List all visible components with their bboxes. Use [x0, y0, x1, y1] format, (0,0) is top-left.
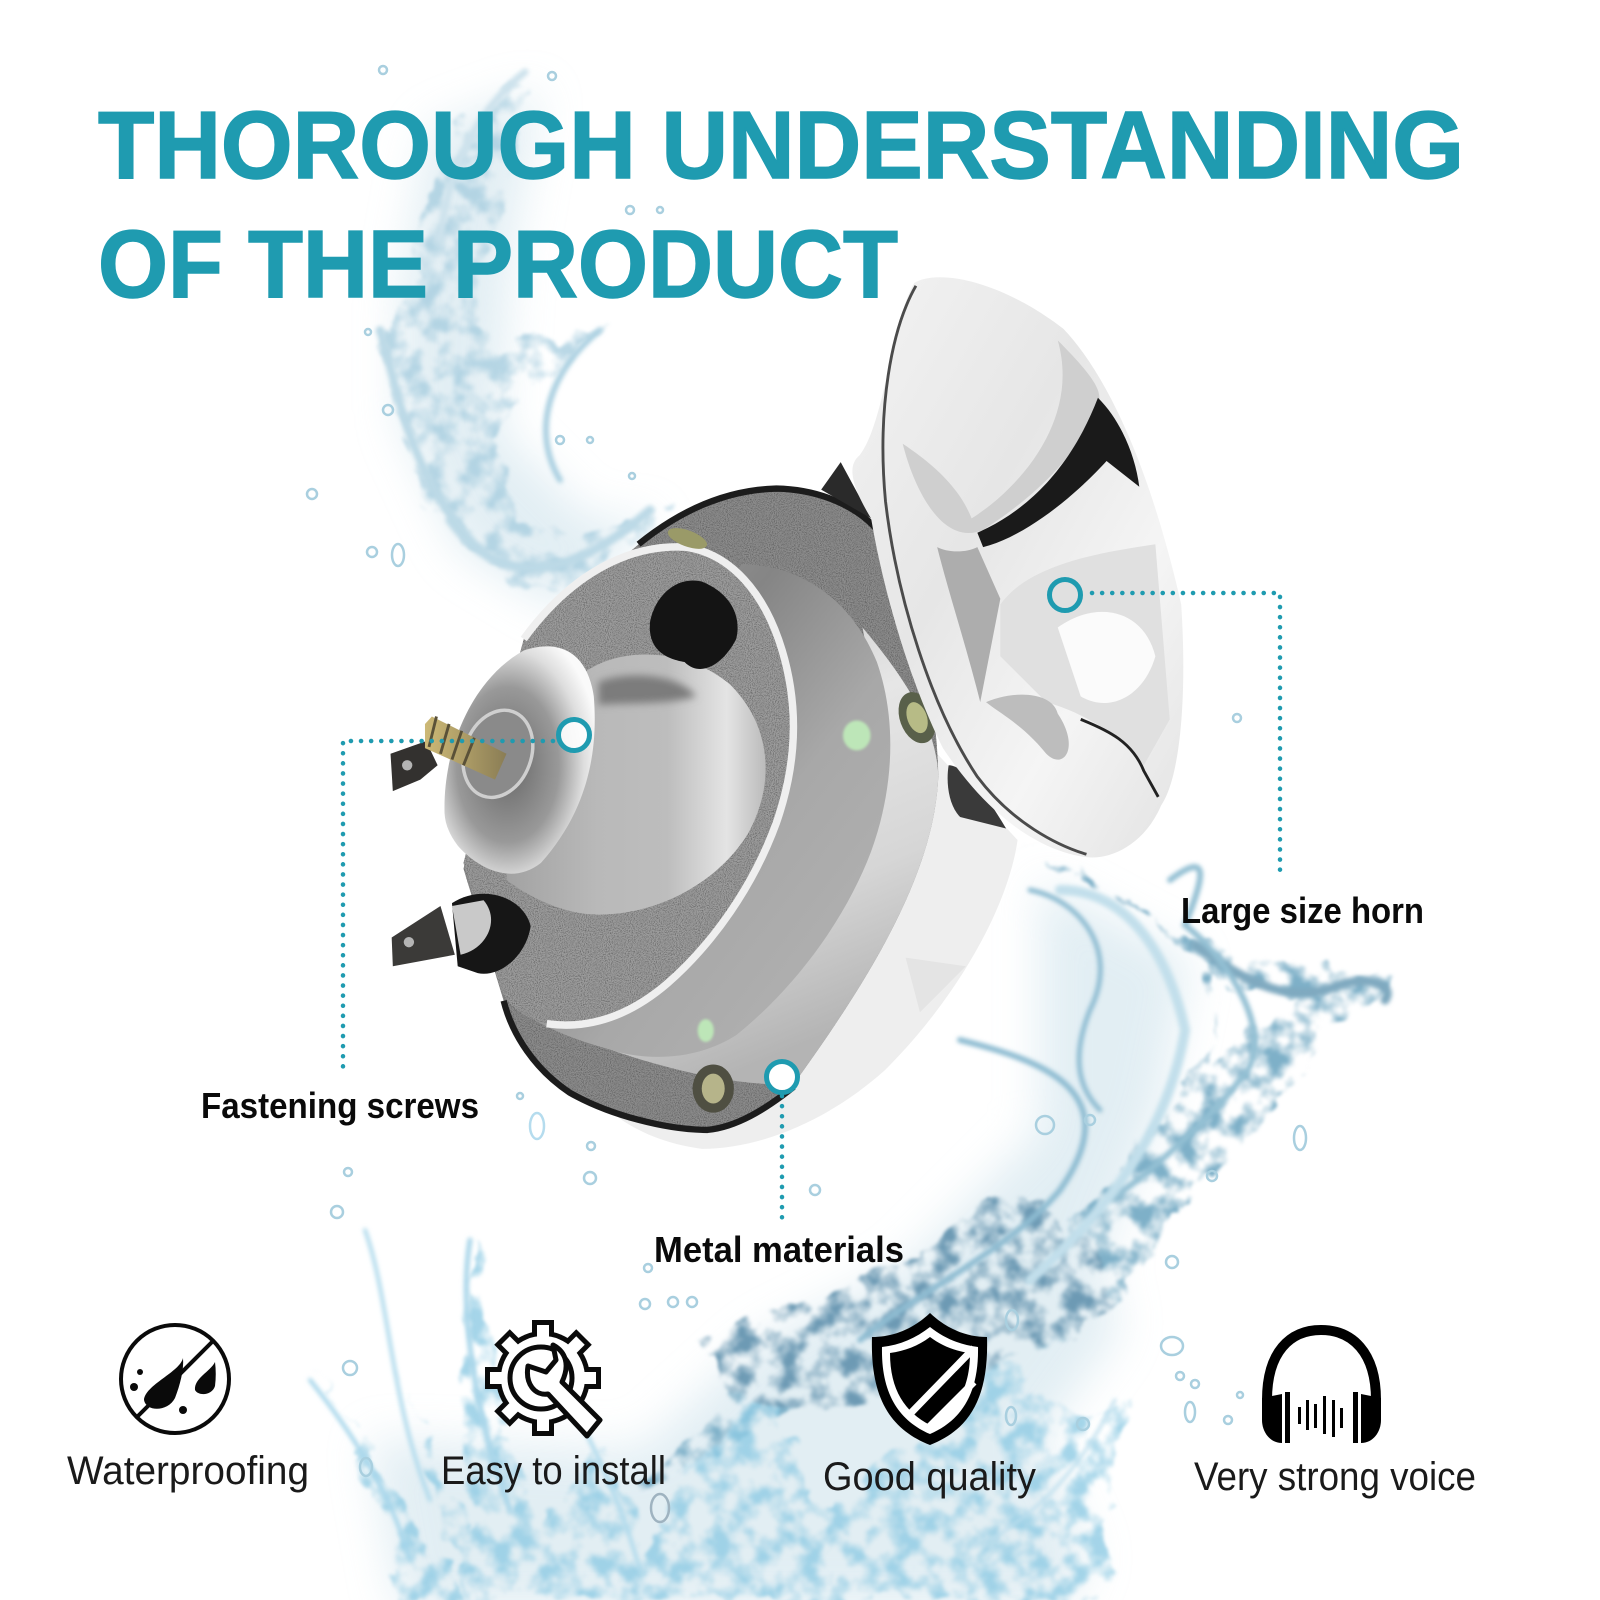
silver ring band	[610, 627, 938, 1084]
housing seam	[906, 958, 966, 1012]
label: Good quality	[823, 1455, 1036, 1499]
leader line	[343, 741, 553, 1072]
horn dark reflection	[977, 398, 1139, 547]
horn lower lip	[986, 695, 1069, 760]
water: droplets	[307, 66, 1306, 1522]
horn throat	[937, 547, 1000, 702]
leader line	[780, 1096, 784, 1226]
label: Very strong voice	[1194, 1455, 1476, 1499]
threaded bolt	[425, 716, 507, 780]
title line 1: THOROUGH UNDERSTANDING	[98, 92, 1464, 199]
label: Large size horn	[1181, 890, 1424, 931]
dome inner tier	[463, 547, 793, 1025]
label: Easy to install	[441, 1449, 666, 1493]
title line 2: OF THE PRODUCT	[98, 211, 898, 318]
feature: waterproofing	[67, 1325, 309, 1493]
white outer housing	[616, 754, 1018, 1149]
cone body	[507, 654, 766, 915]
horn lower shading	[1000, 544, 1170, 765]
cup top	[444, 646, 595, 874]
feature: easy to install	[441, 1320, 666, 1493]
leader line	[1092, 593, 1280, 875]
title	[98, 92, 1464, 318]
horn inner pale grey	[903, 340, 1099, 533]
screw bottom	[693, 1064, 734, 1113]
horn rim dark line	[883, 286, 1086, 854]
feature: good quality	[823, 1313, 1036, 1499]
horn bell	[852, 277, 1183, 858]
label: Waterproofing	[67, 1449, 309, 1493]
cup inner washer	[451, 700, 545, 807]
lower terminal	[392, 894, 531, 974]
callout: fastening screws	[201, 720, 590, 1126]
marker	[1050, 580, 1080, 610]
icon: crossed water drops	[121, 1325, 229, 1433]
product photo: horn	[391, 277, 1183, 1149]
horn crack line	[1081, 719, 1158, 797]
marker	[766, 1062, 798, 1092]
horn highlight	[1058, 612, 1155, 703]
dark rim bottom	[504, 1001, 794, 1130]
green glints	[698, 721, 871, 1042]
cone dark band	[598, 675, 696, 705]
screw right	[892, 687, 942, 748]
dark rim top	[639, 489, 885, 544]
feature: very strong voice	[1194, 1330, 1476, 1499]
callout: metal materials	[654, 1062, 904, 1270]
callout: large size horn	[1050, 580, 1424, 931]
water: strands	[310, 72, 1387, 1570]
water splash background	[307, 66, 1396, 1600]
rubber knob	[650, 580, 738, 669]
dome lip highlight	[524, 547, 793, 1025]
icon: gear and wrench	[485, 1320, 601, 1436]
screw top	[665, 524, 710, 553]
label: Fastening screws	[201, 1085, 479, 1126]
marker	[558, 720, 590, 750]
grey flange	[463, 489, 938, 1130]
water: mottled splash body	[310, 70, 1396, 1600]
water: soft haze	[370, 90, 1190, 1600]
icon: headphones with waveform	[1262, 1330, 1381, 1443]
dome outer tier	[512, 564, 890, 1057]
terminal hole	[402, 760, 412, 770]
upper terminal	[391, 741, 438, 791]
icon: shield	[872, 1313, 987, 1445]
horn neck bottom shadow	[948, 765, 1006, 828]
horn neck top	[821, 462, 871, 518]
label: Metal materials	[654, 1229, 904, 1270]
